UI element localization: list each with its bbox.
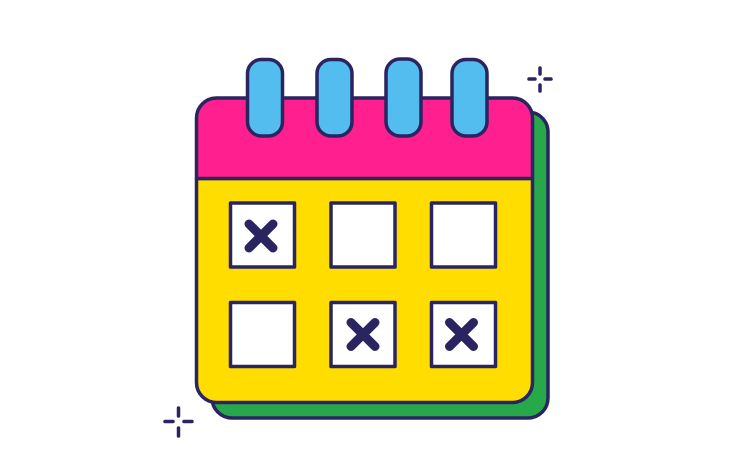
yellow page [196, 178, 532, 402]
sparkle bottom left [165, 408, 192, 436]
ring 1 [248, 60, 282, 136]
x marks [249, 224, 474, 346]
green back page [212, 112, 548, 418]
date box row 1 column 1 [230, 203, 294, 267]
calendar body [196, 98, 532, 402]
x mark row 2 column 2 [351, 322, 375, 346]
x mark row 1 column 1 [249, 224, 273, 248]
date box row 2 column 2 [331, 302, 395, 366]
pink header [196, 98, 532, 178]
date box row 1 column 3 [432, 203, 496, 267]
ring 3 [386, 59, 421, 136]
date box row 2 column 1 [230, 302, 294, 366]
sparkle top right [529, 68, 551, 91]
date box row 2 column 3 [432, 302, 496, 366]
ring 2 [317, 60, 352, 136]
date box row 1 column 2 [331, 203, 395, 267]
x mark row 2 column 3 [450, 322, 474, 346]
binder rings [248, 59, 487, 136]
date grid [230, 203, 496, 366]
ring 4 [452, 60, 487, 136]
